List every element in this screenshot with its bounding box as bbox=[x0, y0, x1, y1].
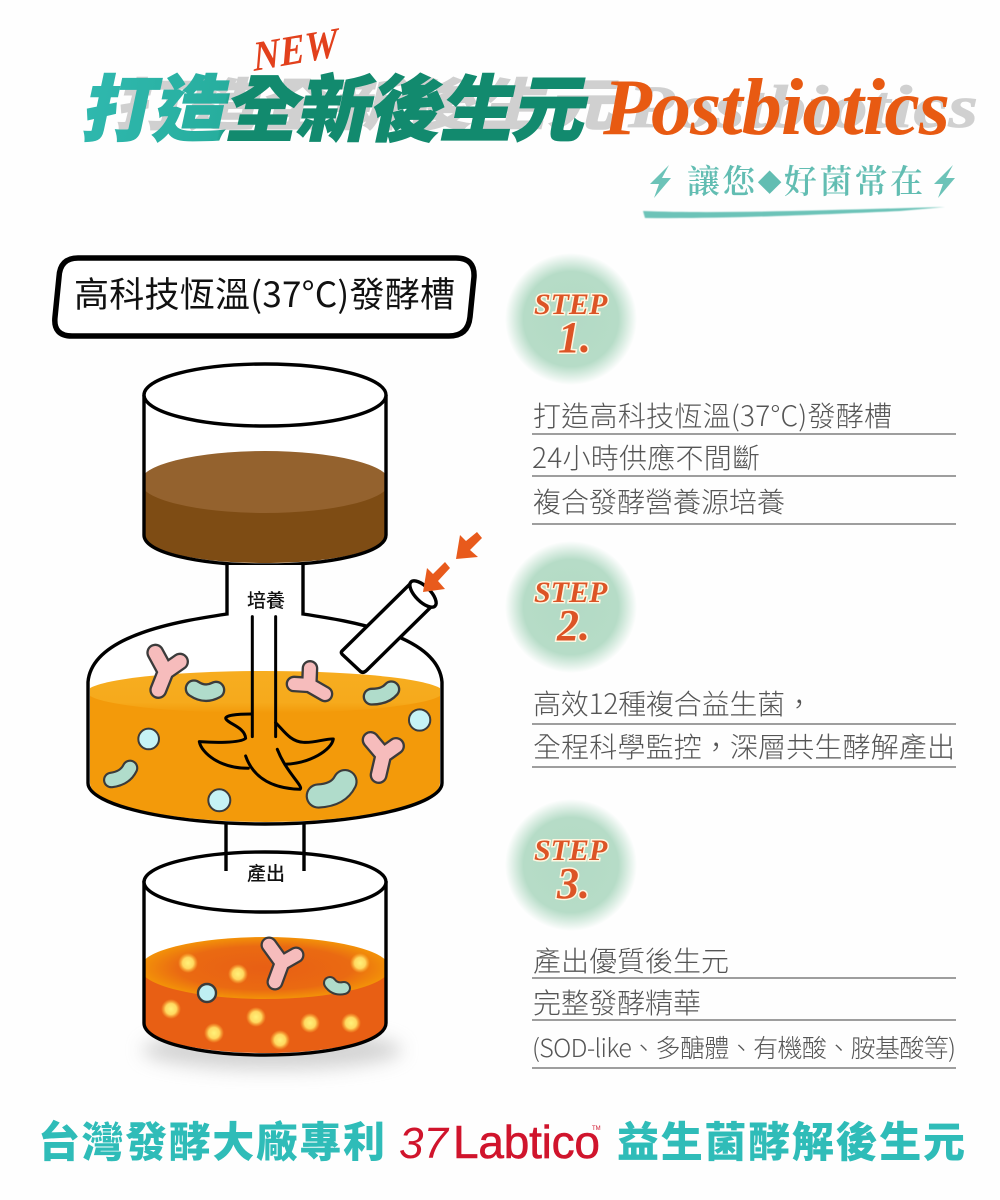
vessel shadow bbox=[142, 1030, 402, 1070]
callout: fermentation tank label: 高科技恆溫(37°C)發酵槽 bbox=[74, 267, 455, 318]
middle vessel bbox=[85, 532, 482, 827]
step 3 text: 完整發酵精華 bbox=[533, 982, 701, 1022]
bottom vessel bbox=[140, 824, 402, 1070]
diagram: fermentation apparatus bbox=[85, 364, 482, 1070]
subtitle text: 好菌常在 bbox=[784, 164, 923, 201]
title shadow bbox=[110, 61, 978, 142]
subtitle text: 讓您 bbox=[687, 165, 755, 201]
footer banner bbox=[38, 1109, 965, 1170]
arrow: lower inlet bbox=[423, 562, 450, 592]
badge: step 2: 2. bbox=[556, 601, 590, 650]
brush underline bbox=[643, 207, 945, 218]
callout: fermentation tank label bbox=[55, 258, 474, 336]
title postbiotics: Postbiotics bbox=[602, 64, 950, 152]
subtitle text: ◆ bbox=[758, 170, 782, 197]
glowing particles bbox=[161, 953, 370, 1050]
badge: step 1: STEP bbox=[534, 288, 608, 321]
subtitle bbox=[643, 164, 955, 218]
title chinese: 打造全新後生元 bbox=[76, 52, 601, 156]
footer left text: 台灣發酵大廠專利 bbox=[38, 1109, 385, 1170]
badge: step 3 bbox=[505, 799, 637, 931]
badge: step 3: STEP bbox=[534, 834, 608, 867]
title shadow: 打造全新後生元 bbox=[110, 61, 633, 142]
footer right text: 益生菌酵解後生元 bbox=[617, 1109, 965, 1170]
icon: right bolt bbox=[934, 165, 955, 198]
badge: step 2: STEP bbox=[534, 576, 608, 609]
label: culture: 培養 bbox=[247, 586, 285, 613]
icon: left bolt bbox=[650, 165, 671, 198]
label: output: 產出 bbox=[247, 859, 285, 886]
badge: step 2 bbox=[505, 541, 637, 673]
step 3 panel bbox=[505, 799, 956, 1068]
step 2 text bbox=[532, 683, 956, 767]
step 2 text: 全程科學監控，深層共生酵解產出 bbox=[533, 726, 955, 766]
step 2 panel bbox=[505, 541, 956, 767]
step 1 panel bbox=[505, 253, 956, 524]
impeller bbox=[199, 617, 333, 789]
logo: 37 Labtico: 37 bbox=[399, 1119, 449, 1168]
badge: step 1: 1. bbox=[558, 313, 591, 362]
step 2 text: 高效12種複合益生菌， bbox=[533, 683, 813, 723]
step 1 text bbox=[532, 395, 956, 524]
arrow: upper inlet bbox=[456, 532, 482, 559]
step 1 text: 24小時供應不間斷 bbox=[532, 437, 760, 477]
step 1 text: 複合發酵營養源培養 bbox=[533, 481, 785, 521]
logo: 37 Labtico: Labtico bbox=[453, 1116, 600, 1168]
top vessel bbox=[140, 364, 390, 570]
new label: NEW bbox=[250, 18, 342, 81]
step 3 text bbox=[532, 940, 956, 1068]
badge: step 1 bbox=[505, 253, 637, 385]
title shadow: Postbiotics bbox=[627, 73, 978, 140]
inlet tube bbox=[341, 577, 440, 672]
step 1 text: 打造高科技恆溫(37°C)發酵槽 bbox=[533, 395, 892, 435]
badge: step 3: 3. bbox=[556, 859, 590, 908]
logo: 37 Labtico: TM bbox=[592, 1126, 601, 1132]
step 3 text: 產出優質後生元 bbox=[533, 940, 729, 980]
title bbox=[76, 18, 978, 156]
bacteria in product bbox=[198, 945, 344, 1002]
bacteria in tank bbox=[111, 653, 430, 811]
step 3 text: (SOD-like、多醣體、有機酸、胺基酸等) bbox=[532, 1029, 956, 1065]
